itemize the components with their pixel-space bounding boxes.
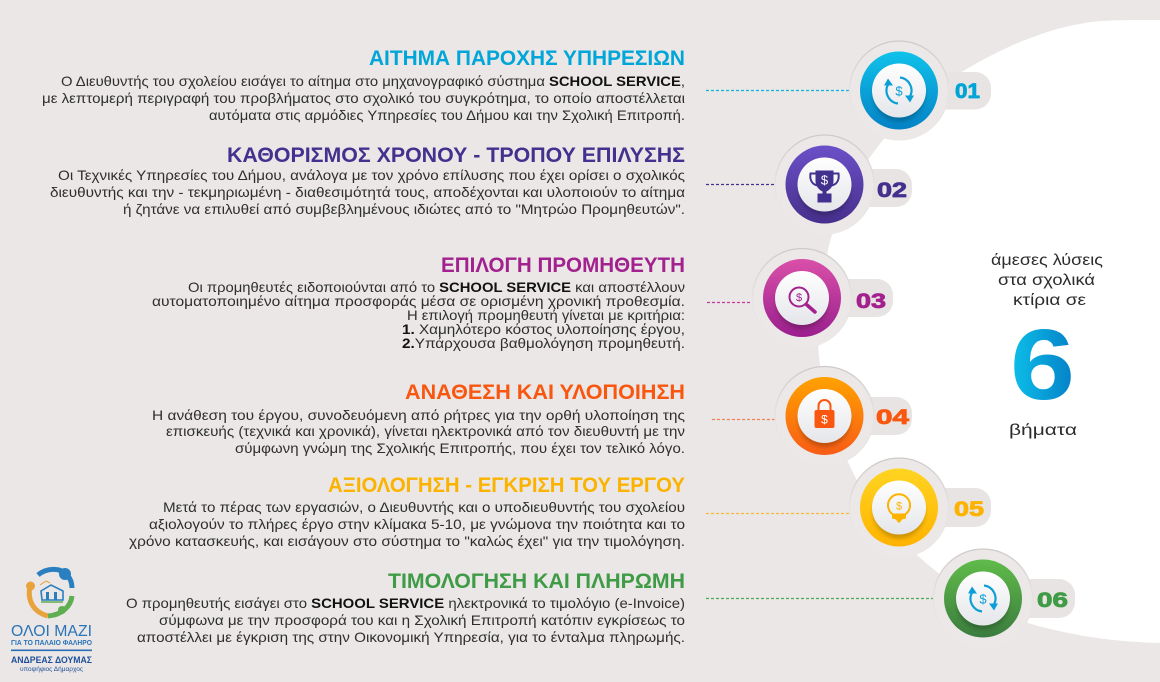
white curved area bbox=[818, 20, 1160, 643]
icon: padlock bbox=[814, 400, 834, 428]
text block: step 1: αυτόματα στις αρμόδιες Υπηρεσίες του Δήμου και την Σχολική Επιτροπή. bbox=[209, 107, 685, 123]
heading: step 5: ΑΞΙΟΛΟΓΗΣΗ - ΕΓΚΡΙΣΗ ΤΟΥ ΕΡΓΟΥ bbox=[328, 474, 685, 497]
logo bbox=[11, 568, 92, 673]
callout text: steps: βήματα bbox=[1009, 422, 1077, 439]
text block: step 6: αποστέλλει με έγκριση της στην Οικονομική Υπηρεσία, για το ένταλμα πληρωμής. bbox=[137, 629, 685, 645]
text block: step 4: επισκευής (τεχνικά και χρονικά), γίνεται ηλεκτρονικά από τον διευθυντή με την bbox=[166, 423, 685, 439]
text block: step 6 bbox=[126, 595, 685, 645]
callout text: intro: κτίρια σε bbox=[1013, 292, 1086, 309]
logo subtitle: ΓΙΑ ΤΟ ΠΑΛΑΙΟ ΦΑΛΗΡΟ bbox=[11, 638, 92, 647]
number: 01: 01 bbox=[955, 80, 980, 103]
icon: padlock: $ bbox=[821, 412, 828, 426]
icon: dollar cycle: $ bbox=[895, 84, 903, 98]
logo candidate name: ΑΝΔΡΕΑΣ ΔΟΥΜΑΣ bbox=[11, 655, 92, 666]
icon: magnifier bbox=[790, 288, 815, 312]
panel: step 3 text bbox=[152, 254, 685, 351]
text block: step 3: 1. Χαμηλότερο κόστος υλοποίησης έργου, bbox=[402, 321, 685, 337]
icon: dollar cycle bbox=[968, 586, 998, 612]
callout: six steps bbox=[991, 252, 1103, 439]
number: 06: 06 bbox=[1037, 589, 1068, 612]
number: 04: 04 bbox=[876, 406, 909, 429]
marker: step 3 bbox=[707, 248, 893, 348]
big number 6: 6 bbox=[1010, 309, 1075, 421]
marker: step 6 bbox=[706, 549, 1075, 648]
panel: step 1 text bbox=[42, 47, 685, 123]
marker: step 2 bbox=[706, 135, 912, 234]
text block: step 4: Η ανάθεση του έργου, συνοδευόμενη από ρήτρες για την ορθή υλοποίηση της bbox=[152, 407, 685, 423]
marker: step 4 bbox=[712, 366, 912, 466]
text block: step 6: Ο προμηθευτής εισάγει στο SCHOOL SERVICE ηλεκτρονικά το τιμολόγιο (e-Invoice) bbox=[126, 595, 685, 611]
callout text: intro bbox=[991, 252, 1103, 309]
text block: step 1: με λεπτομερή περιγραφή του προβλήματος στο σχολικό του συγκρότημα, το οποίο αποστέλλεται bbox=[42, 90, 685, 106]
marker: step 5 bbox=[706, 458, 991, 557]
text block: step 3 bbox=[152, 279, 685, 351]
panel: step 2 text bbox=[50, 144, 685, 217]
marker: step 1 bbox=[706, 41, 991, 140]
callout text: intro: άμεσες λύσεις bbox=[991, 252, 1103, 269]
text block: step 1 bbox=[42, 73, 685, 123]
heading: step 4: ΑΝΑΘΕΣΗ ΚΑΙ ΥΛΟΠΟΙΗΣΗ bbox=[405, 381, 685, 404]
icon: light bulb bbox=[888, 494, 910, 522]
icon: dollar cycle: $ bbox=[979, 592, 987, 606]
text block: step 5 bbox=[129, 499, 685, 549]
text block: step 3: Η επιλογή προμηθευτή γίνεται με κριτήρια: bbox=[407, 307, 685, 323]
heading: step 3: ΕΠΙΛΟΓΗ ΠΡΟΜΗΘΕΥΤΗ bbox=[441, 254, 685, 277]
logo mark bbox=[26, 568, 72, 616]
number: 02: 02 bbox=[877, 179, 907, 202]
text block: step 3: Οι προμηθευτές ειδοποιούνται από το SCHOOL SERVICE και αποστέλλουν bbox=[188, 279, 685, 295]
heading: step 2: ΚΑΘΟΡΙΣΜΟΣ ΧΡΟΝΟΥ - ΤΡΟΠΟΥ ΕΠΙΛΥΣΗΣ bbox=[227, 144, 685, 167]
number: 03: 03 bbox=[856, 290, 886, 313]
text block: step 2: διευθυντής και την - τεκμηριωμένη - διαθεσιμότητά τους, αποδέχονται και υλοποιούν το αίτημα bbox=[50, 184, 685, 200]
text block: step 5: χρόνο κατασκευής, και εισάγουν στο σύστημα το "καλώς έχει" για την τιμολόγηση. bbox=[129, 533, 685, 549]
text block: step 4 bbox=[152, 407, 685, 456]
heading: step 6: ΤΙΜΟΛΟΓΗΣΗ ΚΑΙ ΠΛΗΡΩΜΗ bbox=[388, 570, 685, 593]
logo candidate role: υποψήφιος Δήμαρχος bbox=[20, 666, 83, 673]
icon: trophy bbox=[810, 170, 839, 202]
text block: step 2: ή ζητάνε να επιλυθεί από συμβεβλημένους ιδιώτες από το "Μητρώο Προμηθευτών". bbox=[123, 201, 685, 217]
text block: step 4: σύμφωνη γνώμη της Σχολικής Επιτροπής, που έχει τον τελικό λόγο. bbox=[235, 440, 685, 456]
text block: step 3: αυτοματοποιημένο αίτημα προσφοράς μέσα σε ορισμένη χρονική προθεσμία. bbox=[152, 293, 685, 309]
panel: step 5 text bbox=[129, 474, 685, 549]
text block: step 1: Ο Διευθυντής του σχολείου εισάγει το αίτημα στο μηχανογραφικό σύστημα SCHOOL SERVICE , bbox=[61, 73, 685, 89]
number: 05: 05 bbox=[954, 498, 984, 521]
text block: step 5: Μετά το πέρας των εργασιών, ο Διευθυντής και ο υποδιευθυντής του σχολείου bbox=[163, 499, 685, 515]
text block: step 5: αξιολογούν το πλήρες έργο στην κλίμακα 5-10, με γνώμονα την ποιότητα και το bbox=[149, 516, 685, 532]
panel: step 6 text bbox=[126, 570, 685, 645]
text block: step 6: σύμφωνα με την προσφορά του και η Σχολική Επιτροπή κατόπιν εγκρίσεως το bbox=[159, 612, 685, 628]
text block: step 2 bbox=[50, 167, 685, 217]
icon: dollar cycle bbox=[884, 78, 914, 104]
text block: step 3: 2.Υπάρχουσα βαθμολόγηση προμηθευτή. bbox=[402, 335, 685, 351]
icon: trophy: $ bbox=[821, 172, 829, 188]
callout text: intro: στα σχολικά bbox=[998, 272, 1095, 289]
text block: step 2: Οι Τεχνικές Υπηρεσίες του Δήμου, ανάλογα με τον χρόνο επίλυσης που έχει ορίσει ο σχολικός bbox=[58, 167, 685, 183]
panel: step 4 text bbox=[152, 381, 685, 456]
logo slogan: ΟΛΟΙ ΜΑΖΙ bbox=[11, 623, 92, 640]
icon: light bulb: $ bbox=[896, 500, 902, 512]
heading: step 1: ΑΙΤΗΜΑ ΠΑΡΟΧΗΣ ΥΠΗΡΕΣΙΩΝ bbox=[369, 47, 685, 70]
icon: magnifier: $ bbox=[796, 292, 802, 304]
